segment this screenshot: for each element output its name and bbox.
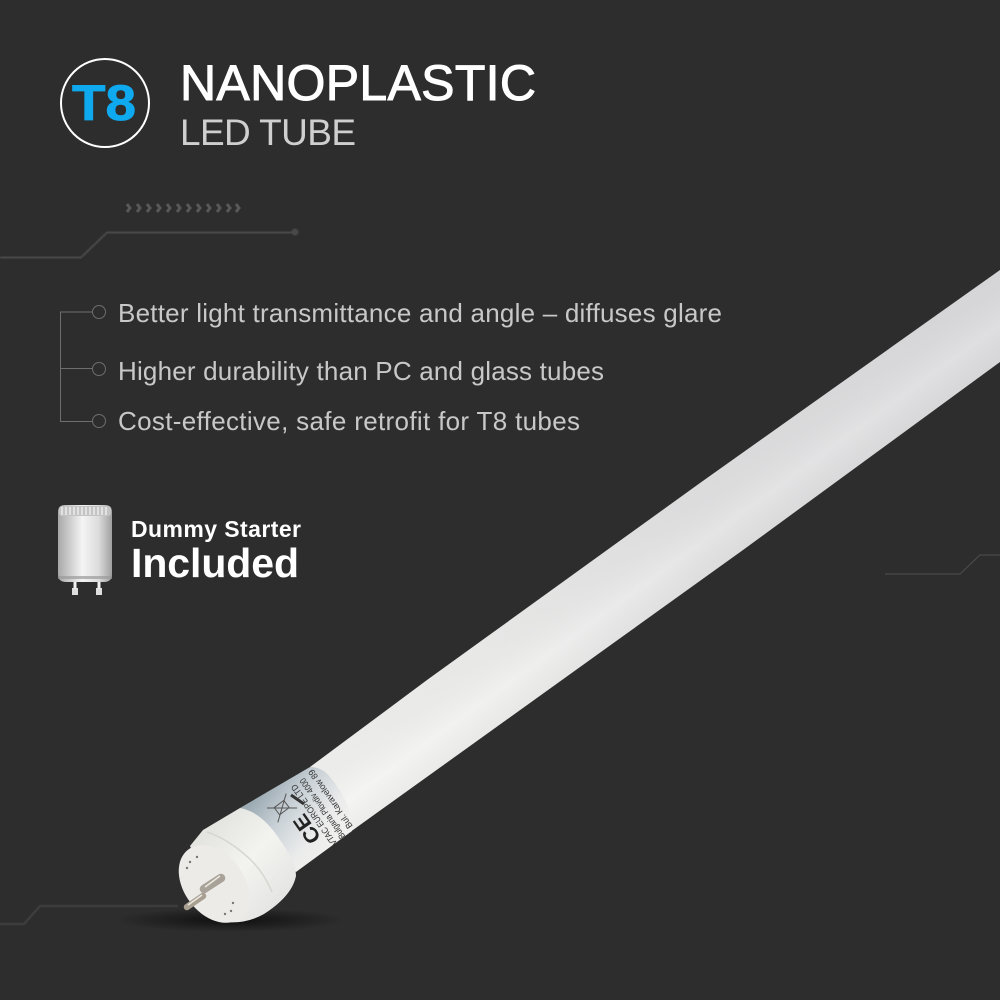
bullet text 1: Better light transmittance and angle – diffuses glare bbox=[118, 298, 722, 328]
title: NANOPLASTIC bbox=[180, 55, 536, 111]
CE mark: CE bbox=[289, 809, 326, 848]
tube shading bbox=[300, 270, 1000, 860]
pins bbox=[187, 876, 221, 907]
icon: T8 badge bbox=[61, 59, 149, 147]
circuit line: right bbox=[885, 555, 1000, 574]
cap pin holes bbox=[186, 856, 234, 915]
collar groove bbox=[207, 832, 272, 892]
title: LED TUBE bbox=[180, 112, 356, 153]
starter caption: Dummy Starter bbox=[131, 516, 301, 542]
circuit line: bottom left bbox=[0, 906, 178, 924]
tube label bbox=[240, 767, 355, 872]
starter caption bbox=[131, 516, 301, 586]
LED tube bbox=[164, 270, 1000, 936]
tube body bbox=[300, 270, 1000, 860]
circuit line: top left bbox=[0, 228, 298, 258]
label text: Bulgaria Plovdiv 4000 bbox=[298, 776, 347, 841]
starter caption: Included bbox=[131, 540, 299, 586]
shadow under tube bbox=[115, 908, 345, 932]
icon: dummy starter bbox=[58, 505, 112, 595]
end cap collar and neck bbox=[190, 808, 296, 922]
bullet connector bbox=[60, 306, 106, 428]
bullet list bbox=[60, 298, 722, 436]
bullet text 2: Higher durability than PC and glass tubes bbox=[118, 356, 604, 386]
cap face bbox=[164, 832, 264, 936]
label text: Bul. Karavelow 89 bbox=[306, 768, 355, 831]
title bbox=[180, 55, 536, 153]
icon: chevron row bbox=[127, 204, 239, 212]
WEEE mark bbox=[267, 794, 297, 822]
class bar bbox=[291, 795, 304, 804]
label text: VTAC EUROPE LTD bbox=[289, 782, 339, 848]
icon: T8 badge: T8 bbox=[72, 75, 136, 131]
bullet text 3: Cost-effective, safe retrofit for T8 tubes bbox=[118, 406, 580, 436]
